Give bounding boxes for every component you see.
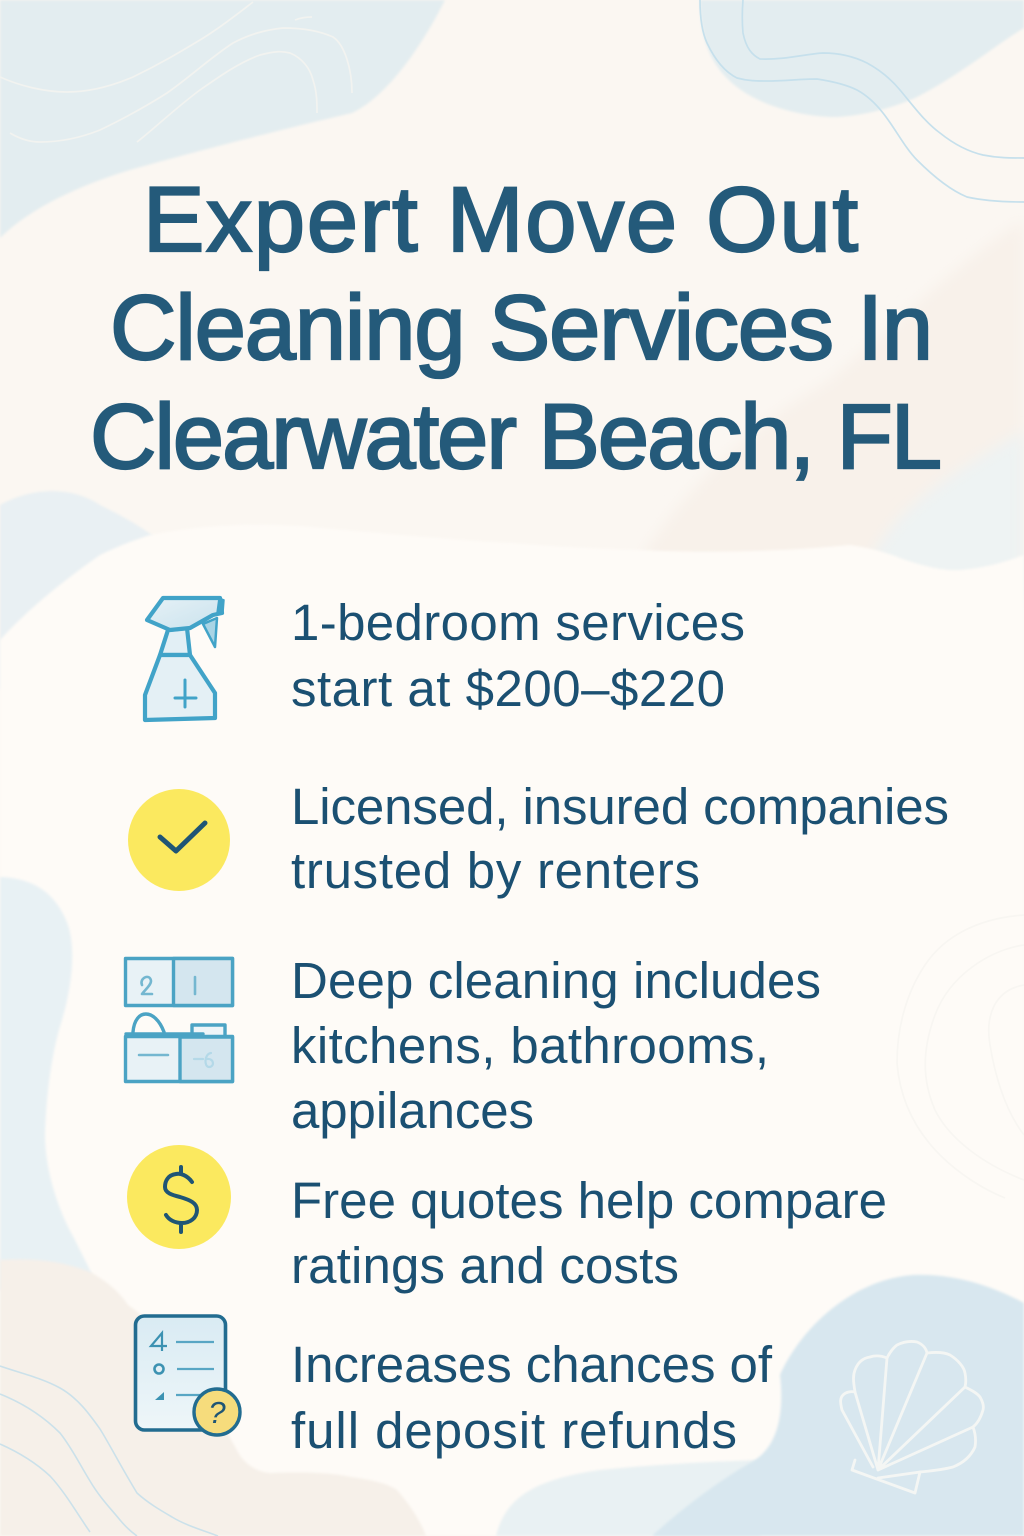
decorative waves: bottom left [0, 1366, 218, 1536]
text: starting price: start at $200–$220 [291, 660, 725, 717]
text: licensed companies [291, 778, 949, 899]
title: Expert Move Out [143, 169, 858, 271]
text: licensed companies: trusted by renters [291, 842, 700, 899]
text: deposit refunds [291, 1336, 773, 1459]
icon: checklist with question badge: ? [208, 1395, 226, 1430]
icon: kitchen cabinets [126, 958, 232, 1082]
title: Cleaning Services In [110, 277, 933, 379]
text: starting price [291, 594, 745, 717]
decorative waves: top right [700, 0, 1024, 202]
text: deposit refunds: full deposit refunds [291, 1402, 737, 1459]
title [90, 169, 942, 488]
item: licensed companies [128, 778, 949, 899]
text: deep cleaning: Deep cleaning includes [291, 952, 821, 1009]
icon: yellow check circle [128, 789, 230, 891]
text: free quotes: Free quotes help compare [291, 1172, 887, 1229]
icon: yellow dollar circle [127, 1145, 231, 1249]
item: deep cleaning [126, 952, 821, 1139]
text: licensed companies: Licensed, insured companies [291, 778, 949, 835]
title: Clearwater Beach, FL [90, 386, 942, 488]
decorative waves: top left [0, 2, 352, 142]
icon: spray bottle [145, 598, 224, 720]
item: free quotes [127, 1145, 887, 1294]
text: deposit refunds: Increases chances of [291, 1336, 773, 1393]
icon: checklist with question badge [136, 1316, 240, 1435]
text: deep cleaning: kitchens, bathrooms, [291, 1017, 769, 1074]
text: deep cleaning [291, 952, 821, 1139]
item: deposit refunds [136, 1316, 773, 1459]
decorative swirl: right side [897, 915, 1024, 1198]
text: starting price: 1-bedroom services [291, 594, 745, 651]
text: free quotes [291, 1172, 887, 1294]
text: deep cleaning: appilances [291, 1082, 534, 1139]
icon: seashell [841, 1341, 983, 1493]
text: free quotes: ratings and costs [291, 1237, 679, 1294]
item: starting price [145, 594, 745, 720]
